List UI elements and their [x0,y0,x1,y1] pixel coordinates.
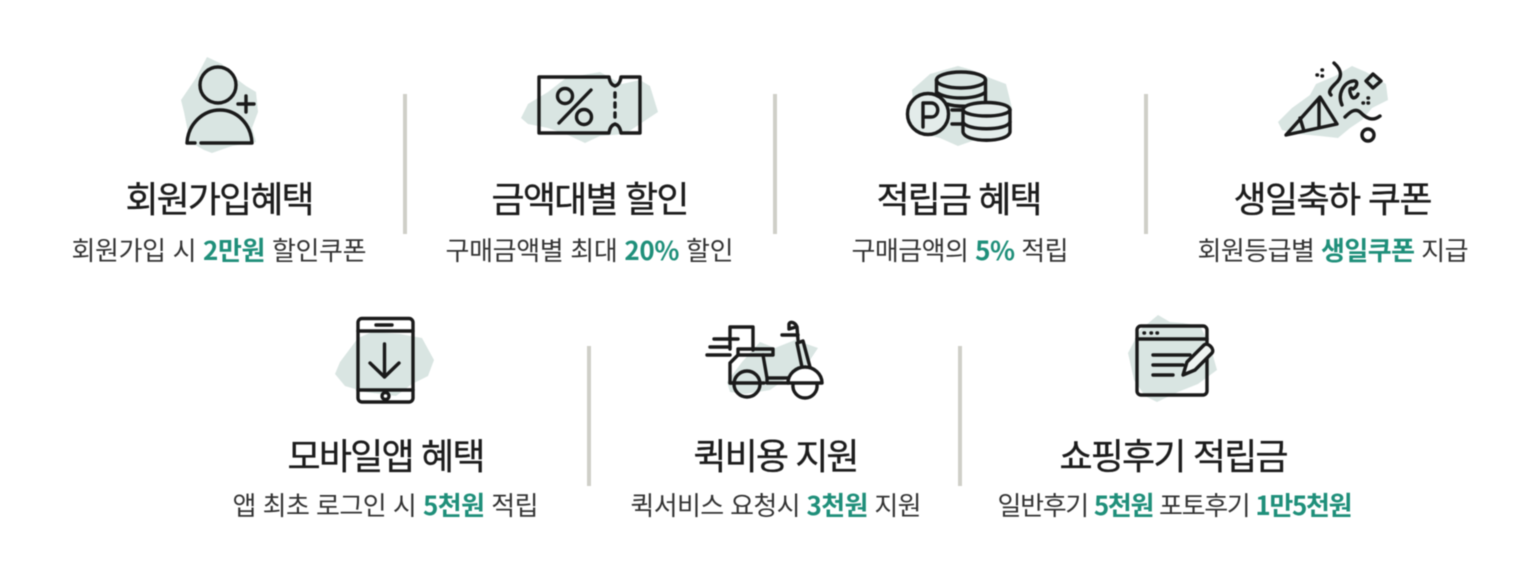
panel: 퀵비용 지원 [630,322,922,523]
description: 일반후기 5천원 포토후기 1만5천원 [998,486,1352,523]
icon: add member [181,57,258,153]
panel: 모바일앱 혜택 [232,318,538,523]
description: 구매금액별 최대 20% 할인 [446,231,734,268]
panel: 쇼핑후기 적립금 [998,315,1352,523]
heading: 생일축하 쿠폰 [1234,171,1432,223]
heading: 모바일앱 혜택 [288,428,486,480]
icon: discount ticket [521,72,658,143]
description: 회원가입 시 2만원 할인쿠폰 [72,231,366,268]
icon: delivery scooter [707,322,822,398]
panel: 회원가입혜택 [72,57,366,268]
description: 앱 최초 로그인 시 5천원 적립 [232,486,538,523]
heading: 금액대별 할인 [492,171,690,223]
description: 퀵서비스 요청시 3천원 지원 [630,486,922,523]
description: 회원등급별 생일쿠폰 지급 [1198,231,1468,268]
heading: 회원가입혜택 [126,171,314,223]
icon: party popper [1278,63,1388,141]
heading: 적립금 혜택 [876,171,1042,223]
panel: 적립금 혜택 [852,66,1068,268]
heading: 쇼핑후기 적립금 [1060,428,1288,480]
panel: 금액대별 할인 [446,72,734,268]
description: 구매금액의 5% 적립 [852,231,1068,268]
icon: point coins [908,66,1012,146]
panel: 생일축하 쿠폰 [1198,63,1468,268]
icon: review window with pen [1128,315,1217,402]
icon: phone download [335,318,434,402]
heading: 퀵비용 지원 [694,428,860,480]
